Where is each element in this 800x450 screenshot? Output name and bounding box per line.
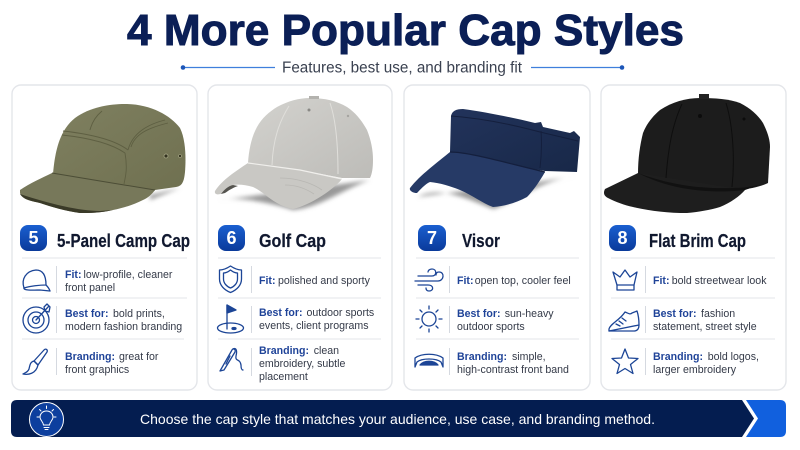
text: best for: statement, street style bbox=[653, 321, 757, 333]
text: branding: great for bbox=[119, 351, 159, 363]
image: olive camp cap bbox=[20, 104, 185, 213]
heading: Flat Brim Cap bbox=[649, 231, 746, 251]
text: fit: Fit: bbox=[457, 275, 473, 287]
text: fit: Fit: bbox=[653, 275, 669, 287]
icon: sneaker bbox=[609, 311, 639, 331]
text: branding: placement bbox=[259, 371, 308, 383]
icon: light bulb bbox=[30, 402, 64, 436]
icon: cap bbox=[23, 270, 50, 291]
title: 4 More Popular Cap Styles bbox=[127, 6, 684, 55]
icon: golf flag bbox=[218, 305, 244, 333]
text: branding: Branding: bbox=[653, 351, 703, 363]
text: best for: Best for: bbox=[653, 308, 697, 320]
text: fit: polished and sporty bbox=[278, 275, 371, 287]
badge 6 bbox=[218, 225, 245, 251]
icon: shield bbox=[220, 266, 242, 292]
text: branding: Branding: bbox=[65, 351, 115, 363]
panel: Visor bbox=[404, 85, 590, 390]
text: fit: low-profile, cleaner bbox=[84, 269, 173, 281]
text: fit: bold streetwear look bbox=[672, 275, 767, 287]
panel: 5-Panel Camp Cap bbox=[12, 85, 197, 390]
text: branding: front graphics bbox=[65, 364, 129, 376]
callout banner bbox=[11, 400, 786, 437]
badge 8 bbox=[609, 225, 636, 251]
panel: Golf Cap bbox=[208, 85, 392, 390]
text: best for: sun-heavy bbox=[505, 308, 554, 320]
image: grey golf cap bbox=[215, 96, 373, 210]
icon: visor band bbox=[415, 354, 443, 367]
text: branding: clean bbox=[314, 345, 339, 357]
text: branding: Branding: bbox=[259, 345, 309, 357]
subtitle with rules bbox=[181, 60, 624, 76]
text: branding: high-contrast front band bbox=[457, 364, 569, 376]
panel: Flat Brim Cap bbox=[601, 85, 786, 390]
text: best for: bold prints, bbox=[113, 308, 165, 320]
icon: crown bbox=[613, 270, 637, 290]
text: fit: open top, cooler feel bbox=[475, 275, 571, 287]
text: best for: Best for: bbox=[65, 308, 109, 320]
text: branding: embroidery, subtle bbox=[259, 358, 345, 370]
text: branding: simple, bbox=[512, 351, 546, 363]
text: fit: Fit: bbox=[65, 269, 81, 281]
icon: needle and thread bbox=[220, 349, 243, 371]
heading: Visor bbox=[462, 231, 500, 251]
callout text: Choose the cap style that matches your audience, use case, and branding method. bbox=[140, 411, 655, 427]
badge 7: 7 bbox=[427, 228, 437, 248]
text: fit: front panel bbox=[65, 282, 115, 294]
text: branding: Branding: bbox=[457, 351, 507, 363]
text: best for: Best for: bbox=[457, 308, 501, 320]
icon: sun bbox=[416, 306, 442, 332]
badge 5 bbox=[20, 225, 47, 251]
text: best for: outdoor sports bbox=[457, 321, 525, 333]
badge 8: 8 bbox=[617, 228, 628, 248]
subtitle with rules: Features, best use, and branding fit bbox=[282, 60, 523, 76]
icon: brush bbox=[23, 349, 47, 374]
icon: target bbox=[23, 304, 50, 333]
icon: star bbox=[612, 349, 638, 374]
badge 5: 5 bbox=[28, 228, 39, 248]
heading: Golf Cap bbox=[259, 231, 326, 251]
image: navy visor bbox=[410, 109, 580, 209]
text: branding: bold logos, bbox=[708, 351, 759, 363]
text: best for: fashion bbox=[701, 308, 735, 320]
text: best for: events, client programs bbox=[259, 320, 369, 332]
badge 6: 6 bbox=[226, 228, 237, 248]
text: best for: modern fashion branding bbox=[65, 321, 182, 333]
heading: 5-Panel Camp Cap bbox=[57, 231, 190, 251]
text: best for: outdoor sports bbox=[306, 307, 374, 319]
text: fit: Fit: bbox=[259, 275, 275, 287]
image: black flat brim cap bbox=[604, 94, 770, 213]
text: branding: larger embroidery bbox=[653, 364, 737, 376]
badge 7 bbox=[418, 225, 446, 251]
icon: wind bbox=[415, 269, 443, 291]
text: best for: Best for: bbox=[259, 307, 303, 319]
